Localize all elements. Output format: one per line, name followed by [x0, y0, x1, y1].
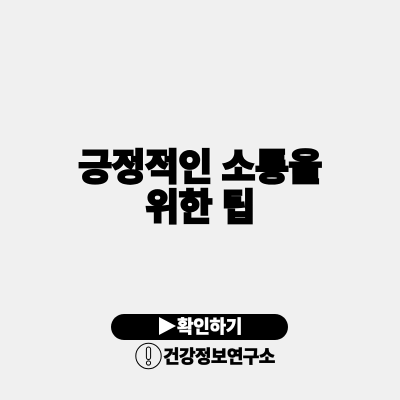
confirm button [111, 314, 288, 340]
title: 위한 팁 [145, 187, 255, 228]
brand row [135, 342, 275, 370]
brand name: 건강정보연구소 [163, 347, 275, 367]
icon: play triangle [159, 317, 176, 335]
title: 긍정적인 소통을 [78, 147, 322, 188]
title [78, 147, 322, 228]
icon: exclamation circle [135, 342, 162, 370]
button label: 확인하기 [177, 317, 242, 337]
